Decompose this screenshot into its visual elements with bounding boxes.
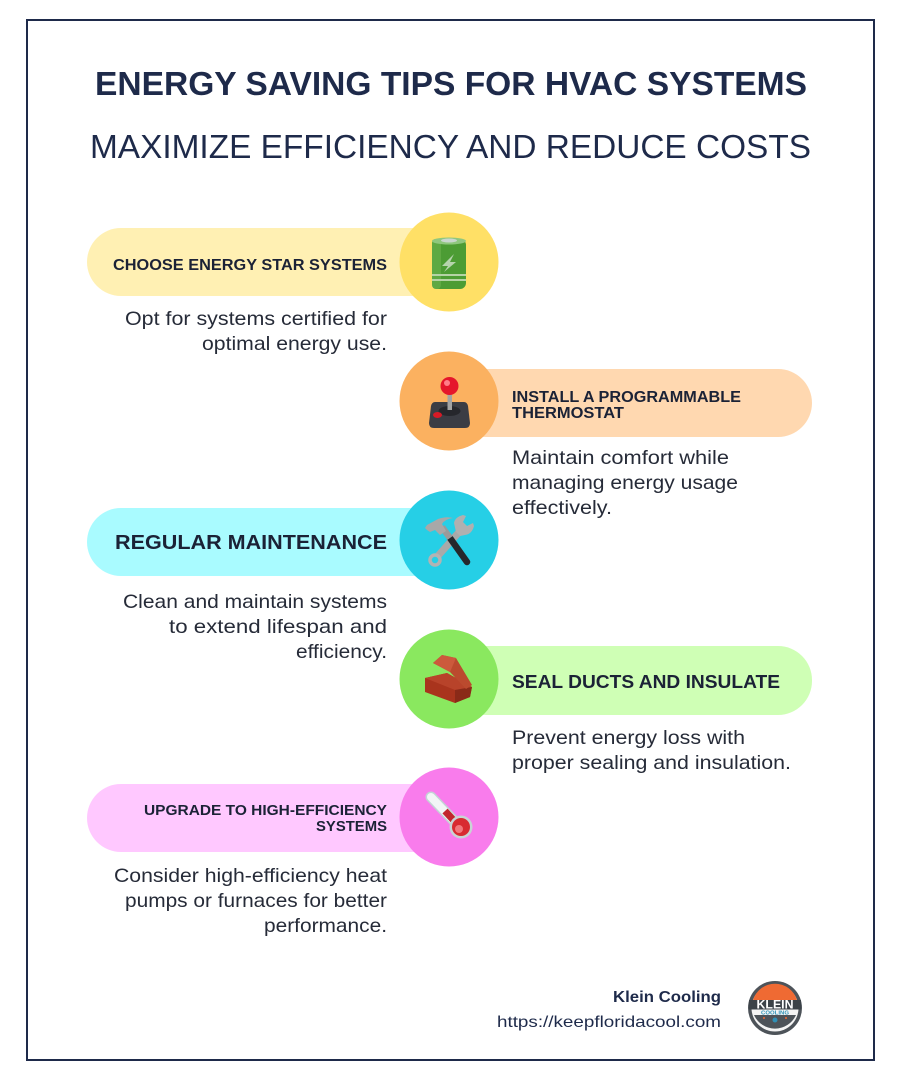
footer: company name and url bbox=[497, 989, 721, 1031]
text: thermostat description: effectively. bbox=[512, 497, 612, 519]
icon: joystick bbox=[429, 377, 470, 428]
text: maintenance description bbox=[123, 591, 387, 663]
subtitle: MAXIMIZE EFFICIENCY AND REDUCE COSTS bbox=[90, 129, 811, 166]
panel: choose energy star systems bbox=[87, 212, 498, 355]
text: seal ducts description bbox=[512, 727, 791, 774]
text: seal ducts description: Prevent energy loss with bbox=[512, 727, 745, 749]
icon: bricks bbox=[425, 655, 472, 703]
heading: install a programmable thermostat: INSTALL A PROGRAMMABLE bbox=[512, 389, 741, 406]
icon: battery bbox=[432, 238, 466, 289]
text: thermostat description: managing energy usage bbox=[512, 472, 738, 494]
panel: install a programmable thermostat bbox=[400, 352, 812, 519]
panel: seal ducts and insulate bbox=[400, 630, 812, 774]
text: seal ducts description: proper sealing and insulation. bbox=[512, 752, 791, 774]
footer: company name and url: Klein Cooling bbox=[613, 989, 721, 1006]
heading: install a programmable thermostat bbox=[512, 389, 741, 422]
logo: Klein Cooling badge: KLEIN bbox=[756, 998, 794, 1012]
text: maintenance description: efficiency. bbox=[296, 641, 387, 663]
text: upgrade description: pumps or furnaces for better bbox=[125, 890, 388, 912]
icon: thermometer bbox=[431, 797, 472, 838]
logo: Klein Cooling badge: COOLING bbox=[761, 1010, 789, 1016]
text: maintenance description: to extend lifespan and bbox=[169, 616, 387, 638]
heading: upgrade to high-efficiency systems: SYSTEMS bbox=[316, 819, 387, 835]
heading: upgrade to high-efficiency systems bbox=[144, 803, 387, 835]
title: ENERGY SAVING TIPS FOR HVAC SYSTEMS bbox=[95, 66, 807, 103]
text: choose energy star description: Opt for systems certified for bbox=[125, 308, 388, 330]
text: upgrade description: Consider high-efficiency heat bbox=[114, 865, 388, 887]
icon: hammer and wrench bbox=[425, 515, 474, 565]
text: choose energy star description bbox=[125, 308, 388, 355]
logo: Klein Cooling badge bbox=[748, 981, 802, 1035]
heading: install a programmable thermostat: THERMOSTAT bbox=[512, 405, 625, 422]
panel: regular maintenance bbox=[87, 490, 498, 663]
text: upgrade description bbox=[114, 865, 388, 937]
heading: seal ducts and insulate: SEAL DUCTS AND INSULATE bbox=[512, 672, 780, 692]
heading: choose energy star systems: CHOOSE ENERGY STAR SYSTEMS bbox=[113, 257, 387, 274]
text: maintenance description: Clean and maintain systems bbox=[123, 591, 387, 613]
heading: upgrade to high-efficiency systems: UPGRADE TO HIGH-EFFICIENCY bbox=[144, 803, 387, 819]
heading: regular maintenance: REGULAR MAINTENANCE bbox=[115, 532, 387, 554]
panel: upgrade to high-efficiency systems bbox=[87, 768, 498, 937]
footer: company name and url: https://keepfloridacool.com bbox=[497, 1014, 721, 1031]
text: choose energy star description: optimal energy use. bbox=[202, 333, 387, 355]
text: upgrade description: performance. bbox=[264, 915, 387, 937]
text: thermostat description bbox=[512, 447, 738, 519]
text: thermostat description: Maintain comfort while bbox=[512, 447, 729, 469]
